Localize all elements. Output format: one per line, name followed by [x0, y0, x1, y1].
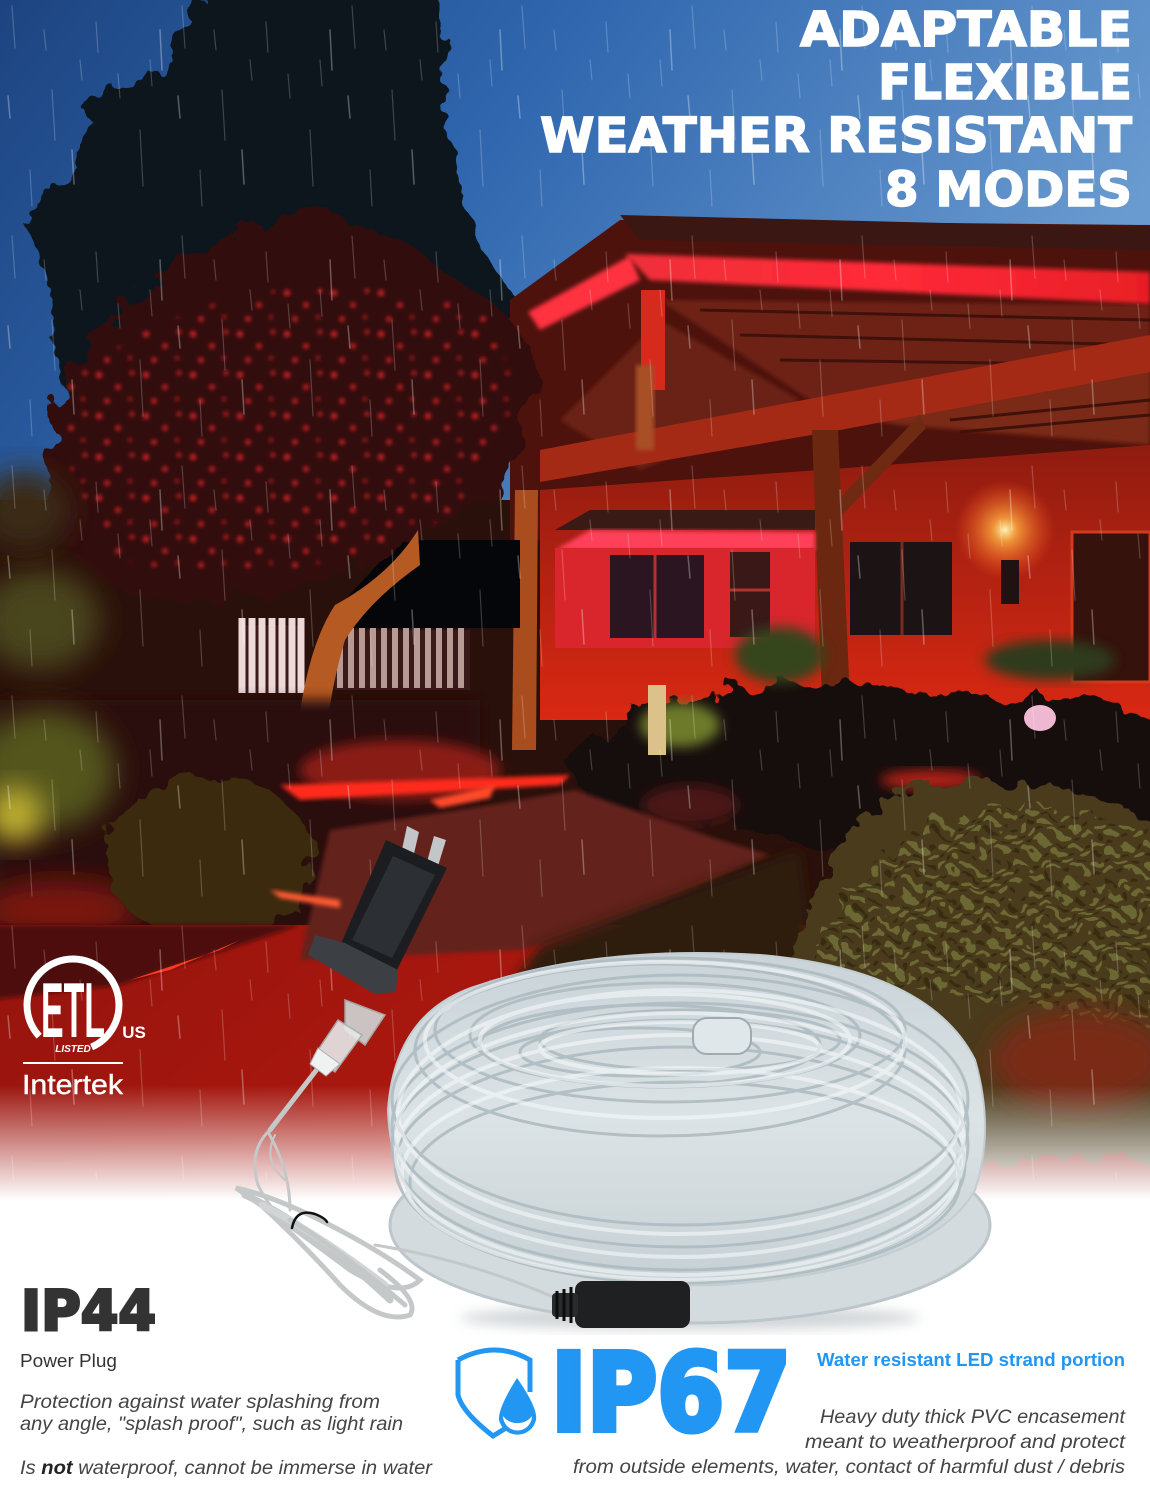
house wall — [540, 445, 1150, 720]
IP67 description: meant to weatherproof and protect — [805, 1432, 1126, 1453]
IP44 heading: IP44 — [21, 1279, 156, 1343]
headline: FLEXIBLE — [878, 55, 1132, 111]
pink glowing band — [555, 530, 815, 550]
icon: ETL Intertek listed mark: US — [122, 1023, 146, 1042]
clear lead cord bundle — [236, 1068, 560, 1317]
icon: ETL Intertek listed mark: LISTED — [55, 1044, 91, 1055]
icon: ETL Intertek listed mark: ETL — [41, 966, 105, 1054]
glowing red rope light along roof — [625, 254, 1150, 304]
IP44 block — [20, 1279, 433, 1479]
left garden foliage — [0, 470, 570, 940]
IP67 heading: IP67 — [551, 1332, 791, 1456]
fence and dark gap behind it — [238, 540, 520, 695]
rain overlay — [0, 0, 1150, 1180]
hanging lantern — [636, 365, 654, 450]
red lit tree — [45, 205, 538, 745]
green juniper bush on the right — [780, 782, 1150, 1160]
icon: shield with water drop — [458, 1350, 536, 1436]
windows — [610, 555, 704, 638]
power plug adapter — [308, 826, 447, 994]
clear connector below plug — [310, 1000, 385, 1076]
rope strands — [392, 958, 968, 1283]
wall lamp — [955, 480, 1055, 580]
power plug label: Power Plug — [20, 1351, 117, 1371]
icon: ETL Intertek listed mark — [22, 959, 146, 1100]
base loop — [390, 1127, 990, 1323]
LED rope light coil — [388, 953, 990, 1330]
black inline connector — [552, 1281, 690, 1328]
headline: WEATHER RESISTANT — [540, 108, 1132, 164]
posts — [641, 290, 665, 390]
white fade at bottom of photo — [0, 1085, 1150, 1200]
strand label: Water resistant LED strand portion — [817, 1350, 1125, 1370]
headline: 8 MODES — [885, 162, 1132, 218]
rafters — [700, 310, 1150, 432]
icon: ETL Intertek listed mark: Intertek — [22, 1069, 124, 1100]
dark shrubs before the house — [570, 627, 1150, 860]
IP67 description — [573, 1407, 1126, 1478]
bay roof — [555, 510, 815, 530]
diagonal main beam — [540, 335, 1150, 482]
IP67 description: from outside elements, water, contact of harmful dust / debris — [573, 1457, 1126, 1478]
headline: ADAPTABLE — [800, 2, 1132, 58]
base fill behind the garden — [0, 500, 1150, 1200]
dark conifer tree — [25, 0, 515, 420]
headline — [540, 2, 1132, 218]
IP67 description: Heavy duty thick PVC encasement — [820, 1407, 1126, 1428]
IP67 block — [458, 1332, 1126, 1478]
IP44 description: any angle, "splash proof", such as light rain — [20, 1414, 403, 1435]
house roof and beams — [510, 215, 1150, 750]
IP44 description: Is not waterproof, cannot be immerse in water — [20, 1458, 433, 1479]
IP44 description: Protection against water splashing from — [20, 1392, 380, 1413]
sky — [0, 0, 1150, 560]
path and lower ground — [0, 790, 1150, 1215]
IP44 description — [20, 1392, 433, 1479]
coil body — [388, 953, 985, 1285]
